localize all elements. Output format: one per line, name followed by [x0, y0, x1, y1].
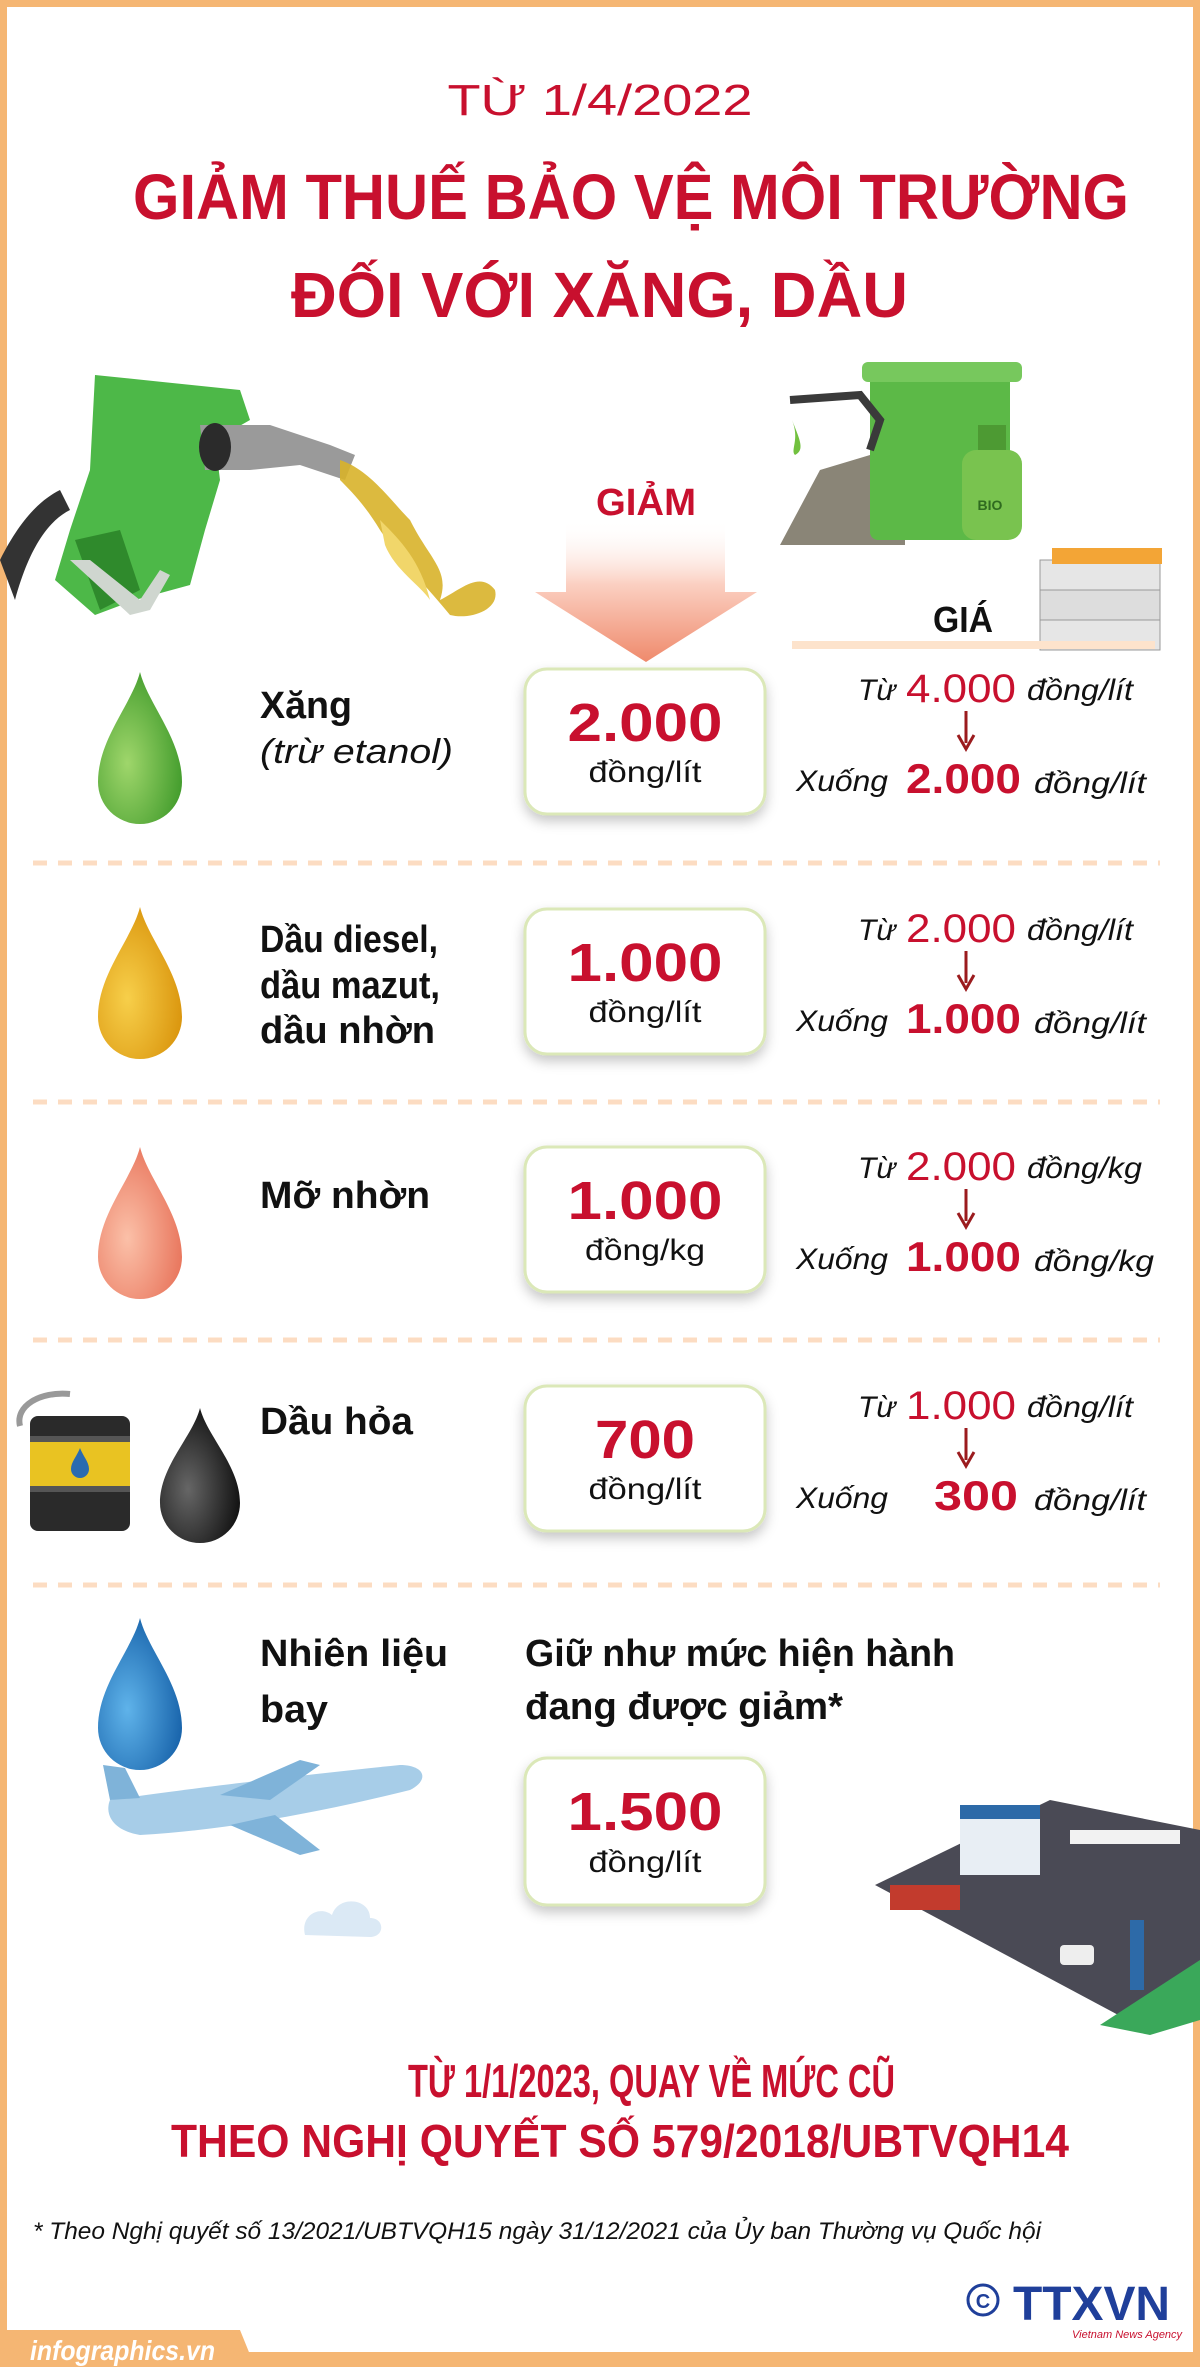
price change: đồng/lít — [1034, 767, 1148, 800]
price change: Xuống — [795, 1243, 888, 1276]
price change: Từ — [858, 1391, 897, 1424]
icon: yellow drop — [98, 907, 182, 1059]
subtitle date: TỪ 1/4/2022 — [448, 76, 752, 125]
box: reduction: đồng/lít — [588, 756, 702, 789]
box: reduction — [525, 669, 765, 814]
price change — [795, 667, 1148, 802]
fuel name: Mỡ nhờn — [260, 1175, 430, 1217]
arrow: decrease — [535, 520, 757, 662]
box: reduction: 1.000 — [568, 933, 722, 993]
illustration: gas station — [875, 1800, 1200, 2035]
price change: 4.000 — [906, 667, 1016, 711]
box: reduction: đồng/kg — [585, 1234, 705, 1267]
row: Nhiên liệu bay — [98, 1618, 955, 1937]
illustration: money stack — [1040, 548, 1162, 650]
price change: 1.000 — [906, 1233, 1021, 1280]
note text: Giữ như mức hiện hành — [525, 1633, 955, 1675]
price change — [795, 1145, 1154, 1280]
price change: đồng/kg — [1027, 1152, 1142, 1185]
heading: GIÁ: GIÁ — [933, 599, 993, 640]
fuel name: Dầu hỏa — [260, 1401, 414, 1443]
price change: đồng/lít — [1034, 1007, 1148, 1040]
footer tab: infographics.vn: infographics.vn — [30, 2335, 215, 2366]
price change: đồng/lít — [1027, 674, 1135, 707]
price change: đồng/kg — [1034, 1245, 1154, 1278]
fuel name — [260, 1633, 448, 1731]
fuel name — [260, 685, 453, 771]
box: reduction: 2.000 — [568, 693, 722, 753]
price change: 1.000 — [906, 1384, 1016, 1428]
box: reduction — [525, 1758, 765, 1905]
price change: Từ — [858, 1152, 897, 1185]
illustration: recycling bin and bio fuel — [780, 362, 1022, 545]
box: reduction: 1.000 — [568, 1171, 722, 1231]
price change: Từ — [858, 914, 897, 947]
illustration: airplane — [103, 1760, 422, 1855]
fuel name: Dầu diesel, — [260, 919, 438, 961]
title: GIẢM THUẾ BẢO VỆ MÔI TRƯỜNG — [133, 160, 1129, 233]
price change: 1.000 — [906, 995, 1021, 1042]
illustration: cloud — [304, 1901, 381, 1937]
price change: đồng/lít — [1027, 914, 1135, 947]
box: reduction: đồng/lít — [588, 1473, 702, 1506]
logo: TTXVN — [968, 2278, 1184, 2341]
box: reduction: đồng/lít — [588, 1846, 702, 1879]
box: reduction: 700 — [595, 1410, 695, 1470]
footnote: * Theo Nghị quyết số 13/2021/UBTVQH15 ngày 31/12/2021 của Ủy ban Thường vụ Quốc hội — [33, 2216, 1042, 2245]
price change: đồng/lít — [1034, 1484, 1148, 1517]
box: reduction — [525, 1386, 765, 1531]
conclusion heading — [171, 2055, 1069, 2167]
box: reduction — [525, 909, 765, 1054]
price change: 2.000 — [906, 1145, 1016, 1189]
row: Dầu diesel — [98, 907, 1148, 1059]
price change: Xuống — [795, 1482, 888, 1515]
price change: Xuống — [795, 1005, 888, 1038]
illustration: fuel nozzle — [0, 375, 496, 616]
fuel name: (trừ etanol) — [260, 733, 453, 771]
fuel name: Xăng — [260, 685, 352, 727]
price change: 2.000 — [906, 755, 1021, 802]
box: reduction: 1.500 — [568, 1782, 722, 1842]
fuel name — [260, 919, 440, 1052]
row: Dầu hỏa — [19, 1384, 1148, 1543]
price change: 2.000 — [906, 907, 1016, 951]
row: Xăng — [98, 667, 1148, 824]
price change: Từ — [858, 674, 897, 707]
price change: đồng/lít — [1027, 1391, 1135, 1424]
icon: green drop — [98, 672, 182, 824]
logo: TTXVN: C — [976, 2291, 990, 2313]
fuel name: dầu nhờn — [260, 1010, 435, 1052]
box: reduction: đồng/lít — [588, 996, 702, 1029]
label: GIẢM: GIẢM — [596, 480, 696, 524]
fuel name: Nhiên liệu — [260, 1633, 448, 1675]
dividers — [33, 863, 1160, 1585]
title — [133, 160, 1129, 331]
footer tab: infographics.vn — [0, 2330, 255, 2367]
note text: đang được giảm* — [525, 1686, 843, 1728]
price change — [795, 907, 1148, 1042]
price change: 300 — [934, 1472, 1018, 1519]
conclusion heading: THEO NGHỊ QUYẾT SỐ 579/2018/UBTVQH14 — [171, 2115, 1069, 2167]
price change — [795, 1384, 1148, 1519]
note text — [525, 1633, 955, 1728]
fuel name: dầu mazut, — [260, 965, 440, 1007]
icon: pink drop — [98, 1147, 182, 1299]
logo: TTXVN: Vietnam News Agency — [1072, 2329, 1184, 2341]
title: ĐỐI VỚI XĂNG, DẦU — [291, 259, 908, 331]
fuel name: bay — [260, 1689, 328, 1731]
price change: Xuống — [795, 765, 888, 798]
box: reduction — [525, 1147, 765, 1292]
row: Mỡ nhờn — [98, 1145, 1154, 1299]
illustration: recycling bin and bio fuel: BIO — [978, 497, 1003, 513]
logo: TTXVN: TTXVN — [1013, 2278, 1170, 2331]
conclusion heading: TỪ 1/1/2023, QUAY VỀ MỨC CŨ — [408, 2055, 895, 2107]
icon: oil barrel with black drop — [19, 1394, 240, 1543]
icon: blue drop — [98, 1618, 182, 1770]
